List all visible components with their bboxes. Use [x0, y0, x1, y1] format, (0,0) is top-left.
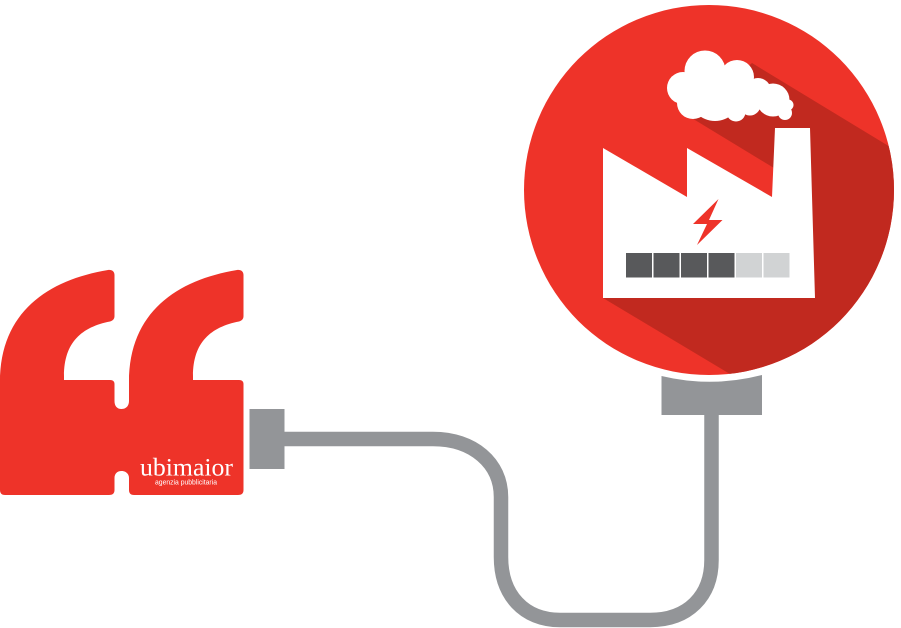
red quote shape [0, 270, 244, 495]
icon: smoke cloud [667, 50, 794, 122]
left plug connector [250, 409, 284, 469]
top plug connector [662, 375, 762, 415]
icon: factory building [603, 128, 815, 298]
icon: lightning bolt [693, 199, 722, 245]
red circle [524, 5, 894, 375]
cable [284, 412, 712, 620]
long shadow [603, 63, 900, 386]
quote mark logo [0, 270, 244, 495]
capacity bars [626, 253, 790, 278]
logo tagline: agenzia pubblicitaria [155, 478, 218, 486]
logo wordmark: ubimaior [140, 452, 233, 482]
factory badge [524, 5, 900, 386]
